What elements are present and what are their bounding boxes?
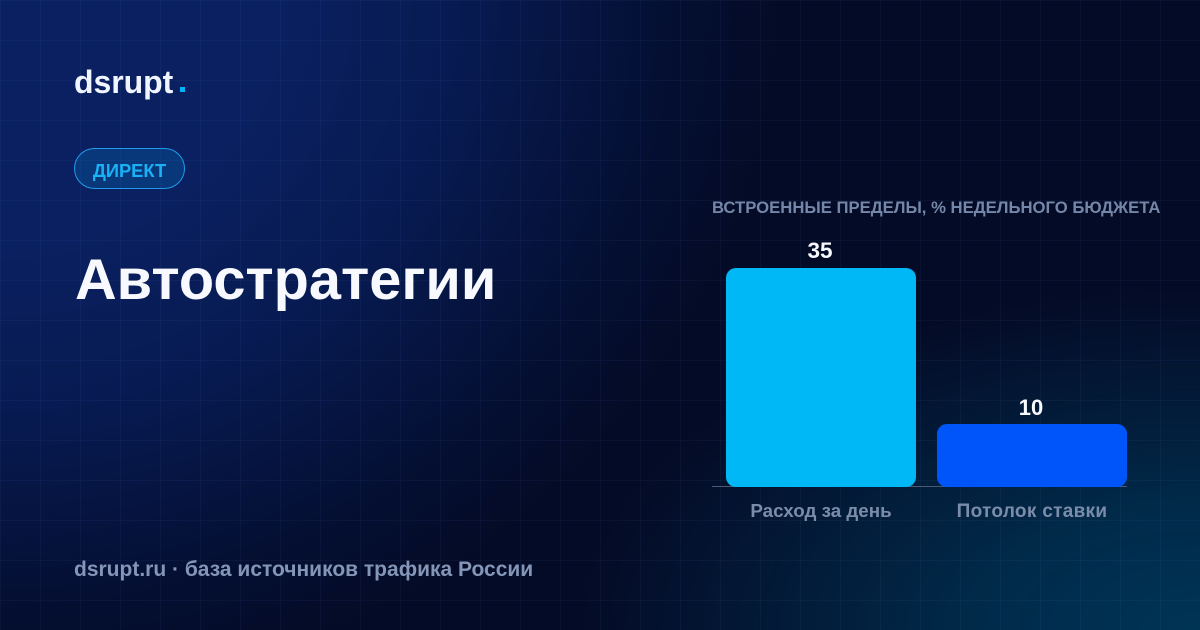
tag: category badge: ДИРЕКТ xyxy=(93,160,166,181)
logo: dsrupt xyxy=(74,64,173,100)
title: Автостратегии xyxy=(75,248,496,312)
label: Расход за день: Расход за день xyxy=(750,500,892,521)
bar: Расход за день xyxy=(726,268,916,487)
tag: category badge xyxy=(74,148,185,189)
footer text: dsrupt.ru · база источников трафика России xyxy=(74,558,533,581)
baseline xyxy=(712,486,1127,487)
bar: Потолок ставки xyxy=(937,424,1127,487)
label: Потолок ставки: Потолок ставки xyxy=(957,501,1107,522)
chart heading: ВСТРОЕННЫЕ ПРЕДЕЛЫ, % НЕДЕЛЬНОГО БЮДЖЕТА xyxy=(712,198,1160,217)
chart: built-in limits xyxy=(712,198,1160,522)
value 35: 35 xyxy=(807,238,833,263)
value 10: 10 xyxy=(1019,395,1043,420)
